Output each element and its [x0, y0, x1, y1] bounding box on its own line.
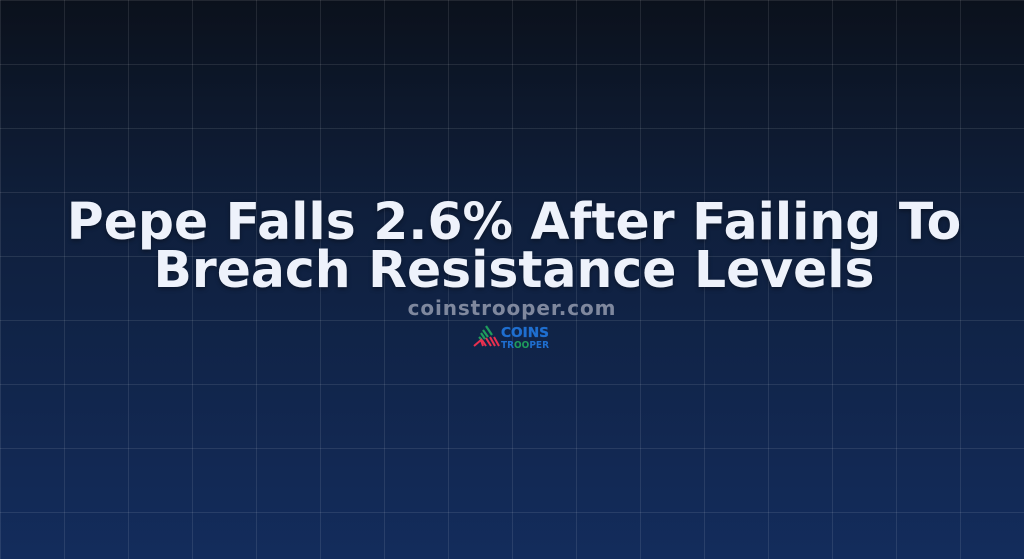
website domain: coinstrooper.com: [408, 296, 616, 320]
icon: green peak bars: [479, 326, 492, 340]
title: Breach Resistance Levels: [153, 240, 875, 299]
logo text: COINS: COINS: [501, 326, 549, 341]
icon: red chart bars: [474, 337, 499, 346]
logo: Coins Trooper: [473, 326, 549, 350]
title: Pepe Falls 2.6% After Failing To: [67, 192, 961, 251]
title: [67, 192, 961, 299]
